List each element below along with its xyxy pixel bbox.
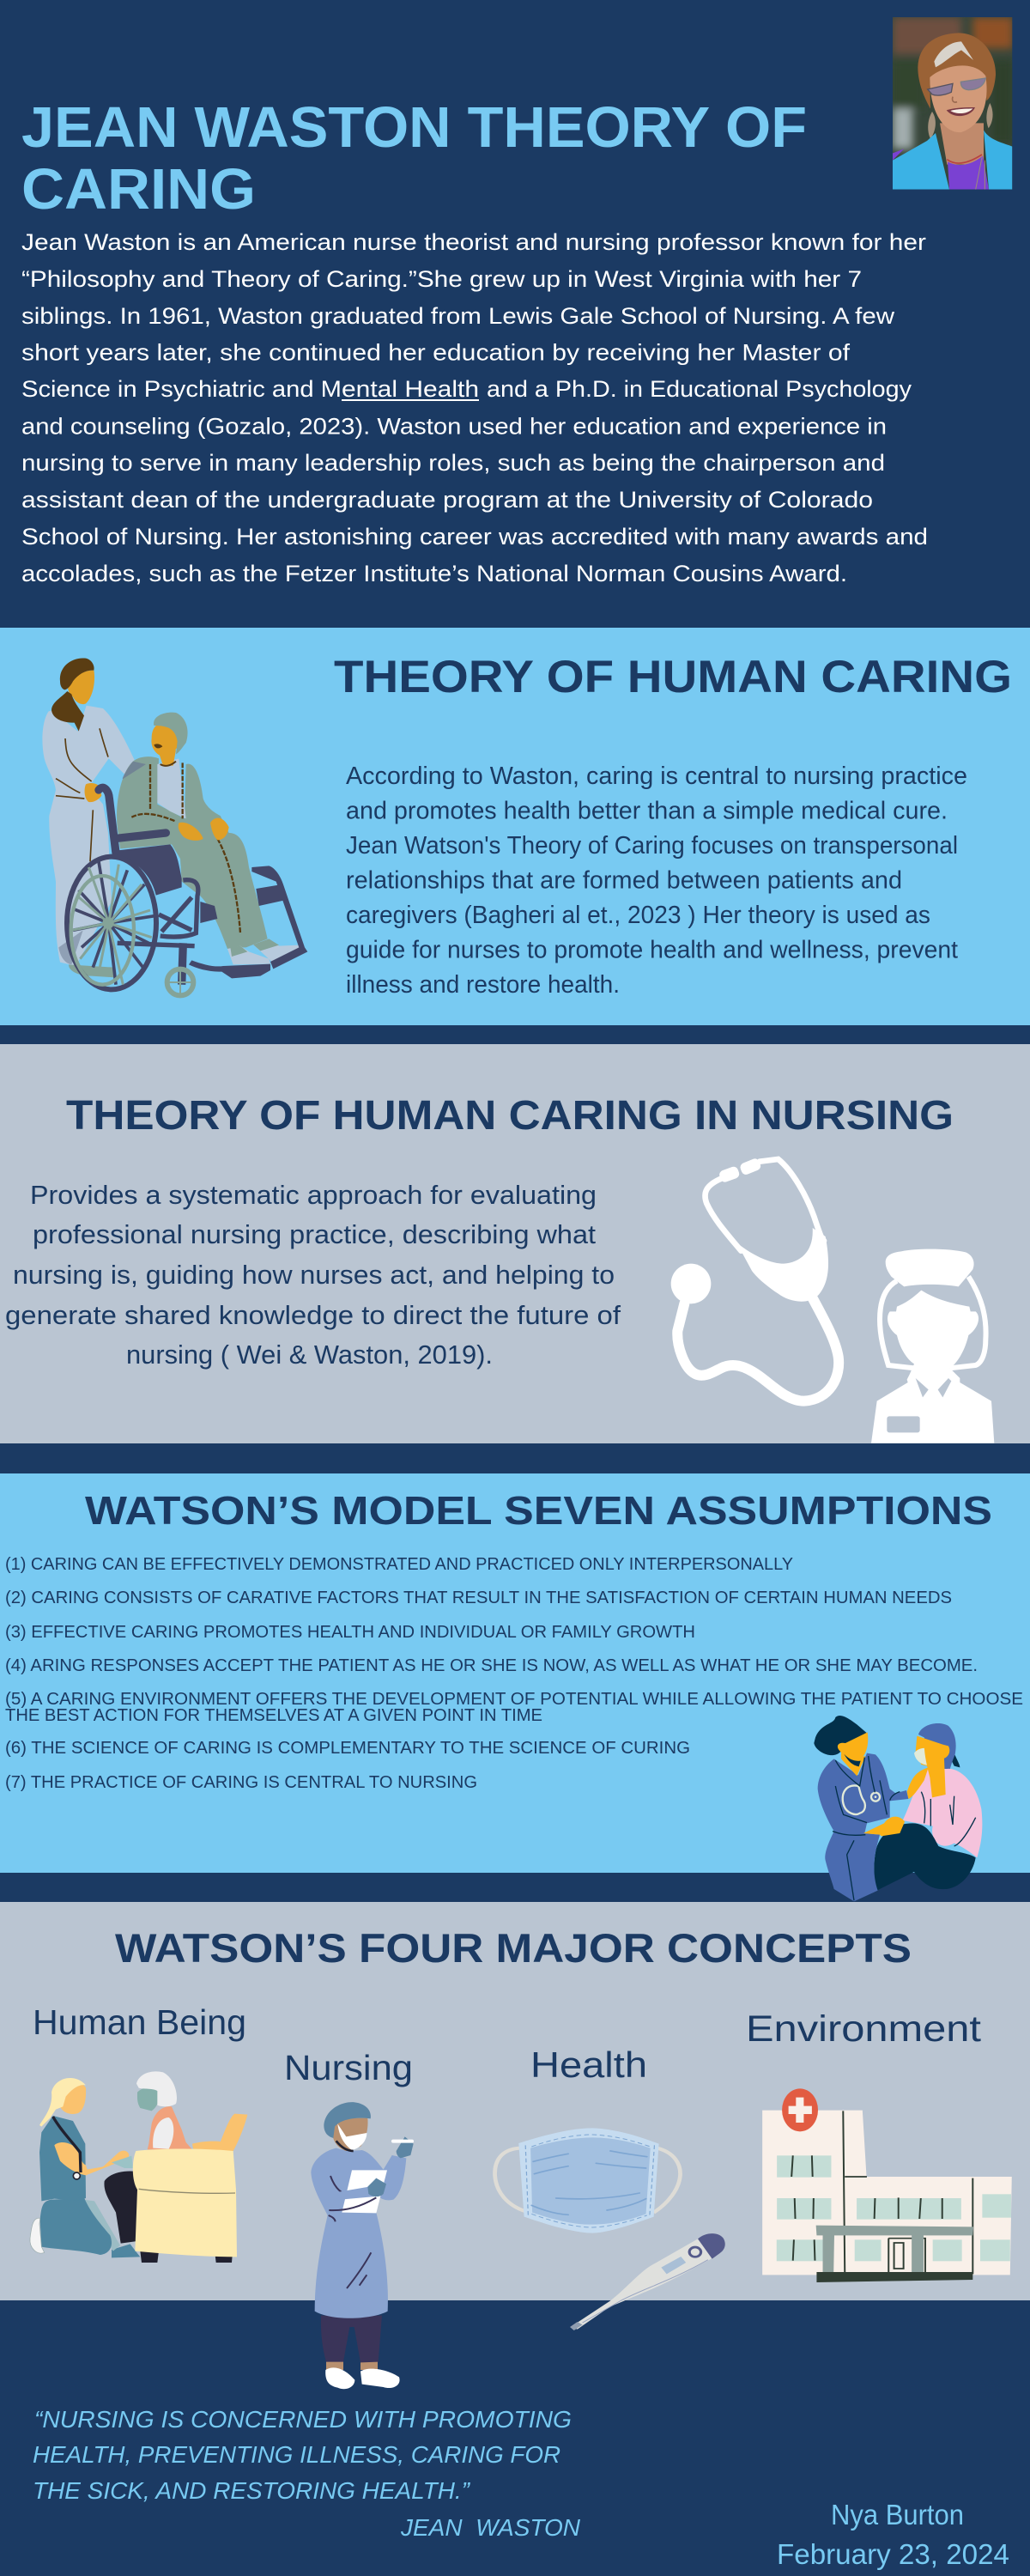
text block: nursing description: professional nursing practice, describing what: [33, 1219, 596, 1249]
text block: nursing description: [5, 1180, 621, 1370]
list: seven assumptions: (2) CARING CONSISTS OF CARATIVE FACTORS THAT RESULT IN THE SATISFACTION OF CERTAIN HUMAN NEEDS: [5, 1589, 952, 1607]
text block: biography: short years later, she continued her education by receiving her Master of: [21, 340, 851, 366]
title: [21, 95, 807, 222]
text block: biography: and a Ph.D. in Educational Psychology: [487, 376, 912, 402]
photo: Jean Waston portrait: [893, 17, 1013, 190]
credit: author and date: Nya Burton: [831, 2499, 964, 2530]
illustration: nurse with seated patient: [30, 2071, 247, 2263]
text block: biography: “Philosophy and Theory of Caring.”She grew up in West Virginia with her 7: [21, 266, 862, 292]
panel: theory of human caring in nursing: [0, 1044, 1030, 1443]
credit: author and date: [777, 2499, 1009, 2570]
label: environment: Environment: [746, 2008, 981, 2050]
text block: biography: nursing to serve in many leadership roles, such as being the chairperson and: [21, 450, 885, 476]
text block: theory description: caregivers (Bagheri al et., 2023 ) Her theory is used as: [346, 902, 930, 929]
quote: Jean Waston: THE SICK, AND RESTORING HEALTH.”: [33, 2477, 471, 2504]
heading: caring in nursing: THEORY OF HUMAN CARING IN NURSING: [66, 1093, 954, 1139]
text block: nursing description: generate shared knowledge to direct the future of: [5, 1300, 621, 1330]
illustration: nurse comforting patient: [814, 1716, 982, 1901]
text block: theory description: Jean Watson's Theory of Caring focuses on transpersonal: [346, 832, 958, 860]
text block: biography: and counseling (Gozalo, 2023). Waston used her education and experience in: [21, 414, 887, 440]
list: seven assumptions: [5, 1555, 1023, 1792]
quote: Jean Waston: JEAN WASTON: [400, 2514, 581, 2541]
title: CARING: [21, 157, 256, 222]
panel: theory of human caring: [0, 628, 1030, 1025]
list: seven assumptions: (1) CARING CAN BE EFFECTIVELY DEMONSTRATED AND PRACTICED ONLY INTERPERSONALLY: [5, 1555, 793, 1574]
illustration: nurse pushing patient in wheelchair: [42, 659, 307, 995]
text block: theory description: and promotes health better than a simple medical cure.: [346, 797, 948, 824]
text block: biography: School of Nursing. Her astonishing career was accredited with many awards and: [21, 524, 928, 550]
list: seven assumptions: (7) THE PRACTICE OF CARING IS CENTRAL TO NURSING: [5, 1773, 477, 1792]
illustration: face mask: [495, 2128, 681, 2233]
illustration: thermometer: [570, 2233, 725, 2330]
heading: seven assumptions: WATSON’S MODEL SEVEN ASSUMPTIONS: [85, 1488, 992, 1533]
list: seven assumptions: THE BEST ACTION FOR THEMSELVES AT A GIVEN POINT IN TIME: [5, 1706, 542, 1725]
icon: nurse silhouette: [871, 1249, 994, 1443]
quote: Jean Waston: HEALTH, PREVENTING ILLNESS, CARING FOR: [33, 2441, 560, 2468]
quote: Jean Waston: [33, 2406, 581, 2541]
text block: theory description: relationships that are formed between patients and: [346, 867, 902, 895]
text block: nursing description: nursing is, guiding how nurses act, and helping to: [13, 1260, 615, 1290]
text block: nursing description: nursing ( Wei & Waston, 2019).: [126, 1340, 493, 1370]
panel: biography header: [22, 17, 1013, 584]
text block: theory description: guide for nurses to promote health and wellness, prevent: [346, 936, 958, 963]
panel: seven assumptions: [0, 1473, 1030, 1901]
panel: four major concepts: [0, 1902, 1030, 2389]
text block: biography: Jean Waston is an American nurse theorist and nursing professor known for her: [21, 229, 926, 255]
illustration: nurse in gown: [311, 2102, 414, 2389]
label: nursing: Nursing: [284, 2048, 413, 2087]
quote: Jean Waston: “NURSING IS CONCERNED WITH PROMOTING: [34, 2406, 572, 2433]
label: human being: Human Being: [33, 2002, 246, 2042]
icon: stethoscope: [671, 1157, 839, 1401]
text block: biography: [21, 229, 928, 586]
list: seven assumptions: (6) THE SCIENCE OF CARING IS COMPLEMENTARY TO THE SCIENCE OF CURING: [5, 1739, 690, 1758]
label: health: Health: [530, 2044, 647, 2085]
text block: theory description: According to Waston, caring is central to nursing practice: [346, 762, 967, 790]
text block: biography: accolades, such as the Fetzer Institute’s National Norman Cousins Award.: [21, 561, 847, 586]
title: JEAN WASTON THEORY OF: [21, 95, 807, 160]
heading: four major concepts: WATSON’S FOUR MAJOR CONCEPTS: [115, 1925, 912, 1971]
text block: biography: Science in Psychiatric and M: [21, 376, 342, 402]
text block: biography: assistant dean of the undergraduate program at the University of Colorado: [21, 487, 873, 513]
list: seven assumptions: (5) A CARING ENVIRONMENT OFFERS THE DEVELOPMENT OF POTENTIAL WHILE ALLOWING THE PATIENT TO CHOOSE: [5, 1690, 1023, 1709]
credit: author and date: February 23, 2024: [777, 2538, 1009, 2570]
list: seven assumptions: (3) EFFECTIVE CARING PROMOTES HEALTH AND INDIVIDUAL OR FAMILY GROWTH: [5, 1623, 695, 1642]
text block: biography: siblings. In 1961, Waston graduated from Lewis Gale School of Nursing. A few: [21, 303, 895, 329]
text block: nursing description: Provides a systematic approach for evaluating: [30, 1180, 597, 1210]
illustration: hospital building: [762, 2088, 1012, 2282]
text block: theory description: [346, 762, 967, 999]
list: seven assumptions: (4) ARING RESPONSES ACCEPT THE PATIENT AS HE OR SHE IS NOW, AS WELL AS WHAT HE OR SHE MAY BECOME.: [5, 1656, 978, 1675]
text block: biography: ental Health: [342, 376, 479, 402]
text block: theory description: illness and restore health.: [346, 971, 620, 999]
heading: theory of human caring: THEORY OF HUMAN CARING: [334, 652, 1012, 702]
